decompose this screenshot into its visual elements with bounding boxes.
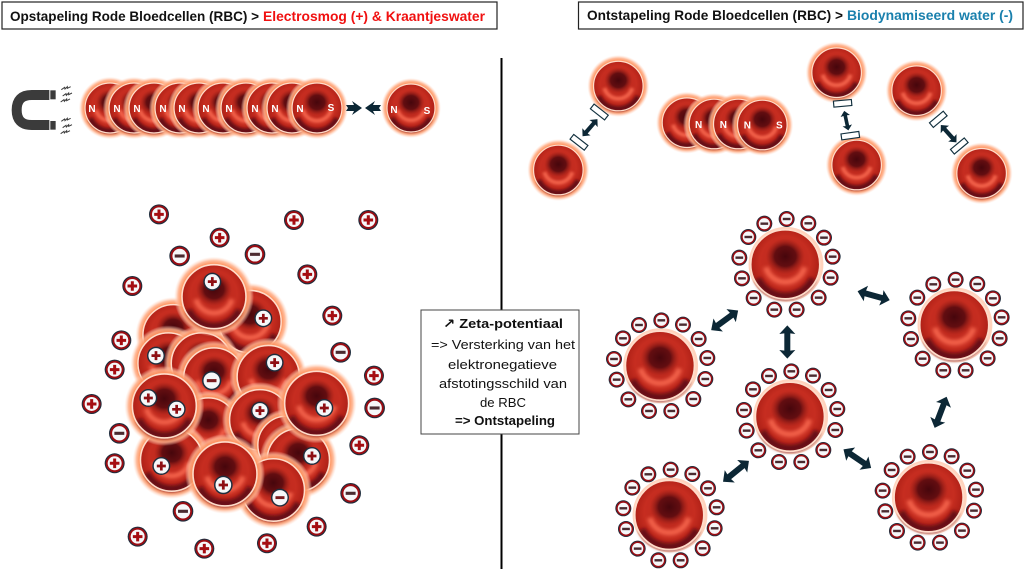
single cell with poles: S — [424, 106, 431, 117]
cell with negative shield: top — [731, 211, 841, 318]
stacked cell chain with poles: N — [296, 104, 304, 115]
heading: unstacking: Biodynamiseerd water (-) — [847, 7, 1013, 23]
stacked cell chain with poles: N — [88, 104, 96, 115]
divider line bottom — [500, 433, 502, 569]
stacked cell chain with poles: N — [178, 104, 186, 115]
stack of four cells with poles: N — [720, 120, 727, 131]
stack of four cells with poles — [656, 92, 793, 156]
arrows: attraction — [346, 101, 381, 115]
callout: zeta potential: ↗ Zeta-potentiaal — [443, 316, 563, 331]
pair three: repelling cells — [886, 60, 1013, 204]
pair two: repelling cells — [806, 42, 888, 196]
heading: stacking: Electrosmog (+) & Kraantjeswater — [263, 8, 486, 24]
single cell with poles — [381, 78, 441, 138]
heading: stacking — [2, 2, 497, 29]
stacked cell chain with poles: N — [159, 104, 167, 115]
free positive ions — [82, 204, 384, 559]
cell with negative shield: bottom left — [615, 462, 725, 568]
stacked red blood cells — [124, 257, 357, 529]
callout: zeta potential: => Versterking van het — [431, 337, 575, 352]
icon: magnet with sparks — [17, 87, 72, 134]
panel: right separated cells with negative shields — [606, 211, 1010, 568]
stack of four cells with poles: N — [695, 120, 702, 131]
panel: top-right separating cells — [527, 42, 1013, 204]
cell with negative shield: right — [900, 272, 1010, 378]
callout: zeta potential: afstotingsschild van — [439, 376, 567, 391]
callout: zeta potential: => Ontstapeling — [455, 413, 555, 428]
stack of four cells with poles: N — [744, 121, 751, 132]
cell with negative shield: left — [606, 312, 715, 419]
pair one: repelling cells — [527, 55, 649, 201]
stack of four cells with poles: S — [776, 121, 783, 132]
callout: zeta potential: de RBC — [480, 395, 526, 410]
stacked cell chain with poles: N — [202, 104, 210, 115]
stacked cell chain with poles: N — [133, 104, 141, 115]
stacked cell chain with poles — [79, 77, 348, 139]
stacked cell chain with poles: N — [251, 104, 259, 115]
divider line top — [500, 58, 502, 310]
stacked cell chain with poles: N — [225, 104, 233, 115]
cell with negative shield: centre — [736, 363, 845, 470]
heading: unstacking: Ontstapeling Rode Bloedcellen (RBC) > — [587, 7, 843, 23]
panel: left clumped cluster with ions — [82, 204, 385, 559]
heading: unstacking — [578, 2, 1023, 29]
stacked cell chain with poles: N — [271, 104, 279, 115]
repulsion arrows — [706, 283, 954, 488]
single cell with poles: N — [390, 105, 398, 116]
stacked cell chain with poles: N — [113, 104, 121, 115]
callout: zeta potential — [421, 310, 579, 434]
callout: zeta potential: elektronegatieve — [448, 357, 557, 372]
free negative ions — [109, 244, 385, 522]
ions on cells — [139, 273, 333, 507]
cell with negative shield: bottom right — [875, 444, 984, 551]
stacked cell chain with poles: S — [328, 103, 335, 114]
heading: stacking: Opstapeling Rode Bloedcellen (RBC) > — [10, 8, 259, 24]
